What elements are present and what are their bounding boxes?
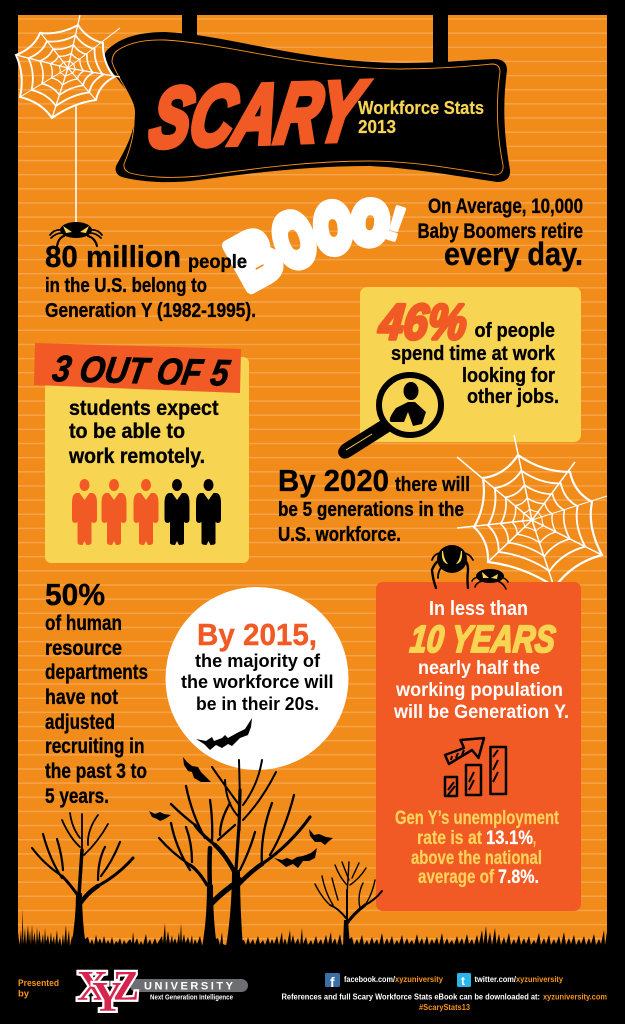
text: 80 million people: people (188, 252, 247, 273)
banner: 3 OUT OF 5: 3 OUT OF 5 (50, 347, 234, 394)
logo: XYZ University: Next Generation Intelligence (150, 994, 233, 1002)
text: spend time at work: looking for (462, 364, 555, 387)
text: unemployment rate: 7.8%. (498, 867, 539, 888)
text: unemployment rate (395, 808, 560, 888)
icon: hanging spider (50, 222, 102, 247)
icon: twitter: t (461, 974, 465, 988)
icons: flying bats (149, 757, 333, 868)
panel: 50% of HR departments: adjusted (45, 711, 115, 734)
grass silhouette (18, 908, 607, 952)
footer: references: xyzuniversity.com (543, 992, 607, 1002)
icon: twitter (457, 973, 471, 988)
cobweb right (457, 435, 607, 590)
panel: 50% of HR departments: the past 3 to (45, 760, 147, 783)
icon: facebook: f (330, 974, 335, 990)
footer: presented by: by (18, 988, 30, 1000)
text: by 2020: there will (395, 473, 470, 496)
footer: references: References and full Scary Workforce Stats eBook can be downloaded at: (282, 992, 540, 1002)
panel: 50% of HR departments: of human (45, 612, 122, 635)
BOOO! text: O (265, 197, 324, 283)
footer: presented by: Presented (18, 978, 59, 989)
text: 80 million people: in the U.S. belong to (45, 275, 207, 297)
moon circle: by 2015: By 2015, (197, 617, 317, 652)
panel: 50% of HR departments: departments (45, 661, 148, 684)
icon: facebook (325, 973, 340, 990)
panel: 3 out of 5 students (34, 343, 249, 563)
text: unemployment rate: , (533, 828, 536, 849)
panel: 50% of HR departments: have not (45, 686, 118, 709)
text: students expect (68, 397, 219, 468)
logo: XYZ University: X (77, 964, 108, 1010)
text: unemployment rate: average of (418, 867, 495, 888)
icon: five people, three highlighted (72, 479, 221, 545)
logo: XYZ University: UNIVERSITY (144, 980, 234, 992)
panel: in less than 10 years: nearly half the (418, 657, 540, 679)
text: baby boomers retire (418, 195, 583, 272)
text: spend time at work: other jobs. (467, 385, 559, 408)
footer: presented by (18, 978, 59, 1000)
cobweb top left (16, 15, 120, 118)
text: 80 million people (45, 239, 256, 322)
moon circle: by 2015: the majority of (195, 651, 321, 671)
text: baby boomers retire: every day. (444, 236, 583, 272)
text: unemployment rate: 13.1% (486, 828, 533, 849)
logo: XYZ University (77, 964, 248, 1021)
tree: far left (32, 813, 133, 947)
heading: SCARY: SCARY (144, 63, 374, 165)
title sign (104, 32, 510, 182)
panel: in less than 10 years: working population (395, 679, 563, 701)
text: students expect: to be able to (69, 420, 185, 443)
panel: 50% of HR departments (45, 577, 148, 808)
panel: in less than 10 years: In less than (429, 598, 528, 620)
icon: rising bar chart (445, 738, 506, 796)
text: students expect: students expect (69, 397, 218, 420)
facebook link: xyzuniversity (395, 974, 443, 984)
heading: Workforce Stats 2013: 2013 (358, 117, 396, 137)
twitter link (474, 974, 563, 984)
BOOO! text: ! (379, 195, 413, 252)
text: spend time at work: of people (474, 319, 555, 342)
big number 46%: 46% (376, 294, 470, 350)
logo: XYZ University: Z (113, 964, 139, 1010)
spider thread (75, 105, 77, 223)
panel: in less than 10 years: will be Generation Y. (393, 701, 569, 723)
BOOO! text: O (312, 190, 354, 266)
heading: Workforce Stats 2013: Workforce Stats (358, 98, 484, 118)
panel: 50% of HR departments: recruiting in (45, 735, 144, 758)
text: by 2020: be 5 generations in the (278, 498, 464, 521)
moon circle: by 2015 (166, 587, 348, 770)
text: unemployment rate: Gen Y’s unemployment (395, 808, 560, 829)
icon: big spider (432, 545, 473, 588)
twitter link: twitter.com/ (474, 974, 517, 984)
footer: references: #ScaryStats13 (419, 1003, 471, 1012)
text: students expect: work remotely. (68, 445, 205, 468)
big text: 10 YEARS: 10 YEARS (408, 619, 558, 661)
text: unemployment rate: above the national (411, 848, 542, 869)
text: baby boomers retire: On Average, 10,000 (428, 195, 583, 218)
sign hanger posts (182, 15, 448, 70)
panel: 50% of HR departments: resource (45, 637, 122, 660)
tree: centre pair (159, 760, 310, 947)
text: 80 million people: Generation Y (1982-1995). (45, 300, 256, 322)
university name pill (130, 979, 248, 992)
logo: XYZ University: Y (92, 975, 123, 1021)
text: spend time at work: spend time at work (391, 342, 556, 365)
panel: 50% of HR departments: 5 years. (45, 785, 109, 808)
twitter link: xyzuniversity (516, 974, 563, 984)
panel: in less than 10 years (376, 582, 581, 911)
heading: Workforce Stats 2013 (358, 98, 484, 137)
text: by 2020: By 2020 (278, 463, 389, 498)
BOOO! text: O (349, 190, 391, 256)
icon: small spider (472, 569, 508, 589)
tree: right small (315, 862, 382, 947)
icon: bat on moon (196, 718, 252, 750)
icon: magnifying glass (338, 375, 441, 459)
text: 80 million people: 80 million (45, 239, 181, 274)
moon circle: by 2015: the workforce will (181, 672, 334, 692)
footer: references (282, 992, 607, 1012)
text: by 2020 (278, 463, 470, 546)
BOOO! text (216, 190, 413, 304)
BOOO! text: B (216, 214, 292, 304)
facebook link: facebook.com/ (344, 974, 396, 984)
panel: 50% of HR departments: 50% (45, 577, 105, 612)
text: baby boomers retire: Baby Boomers retire (418, 220, 583, 243)
text: spend time at work (391, 319, 559, 408)
text: by 2020: U.S. workforce. (278, 523, 401, 546)
panel: 46% of people (338, 287, 581, 459)
text: unemployment rate: rate is at (417, 828, 483, 849)
moon circle: by 2015: be in their 20s. (196, 694, 319, 714)
facebook link (344, 974, 443, 984)
